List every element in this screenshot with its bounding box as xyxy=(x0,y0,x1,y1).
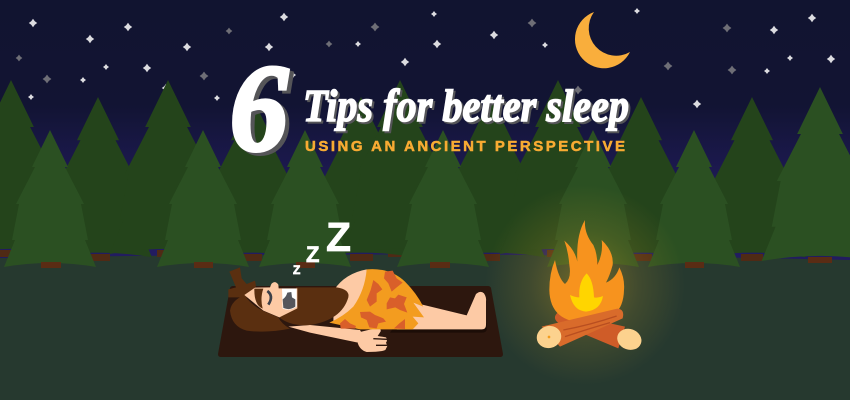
title: Tips for better sleep: Tips for better sleep xyxy=(303,80,629,131)
hair xyxy=(230,295,290,332)
flames xyxy=(549,220,624,323)
fur tunic xyxy=(329,269,424,329)
face xyxy=(244,282,297,317)
campfire glow xyxy=(485,185,685,385)
campfire xyxy=(534,220,644,353)
ground xyxy=(0,254,850,400)
stars xyxy=(16,8,835,108)
sleeping Z letters: Z xyxy=(326,214,351,260)
number 6: 6 xyxy=(230,40,288,177)
arm xyxy=(288,325,367,342)
title: Tips for better sleep: Tips for better sleep xyxy=(305,82,631,133)
sleeping Z letters: Z xyxy=(293,263,300,277)
closed eye xyxy=(267,291,271,305)
back log xyxy=(555,312,644,353)
sideburn xyxy=(254,289,263,309)
torso xyxy=(333,269,370,323)
hair knot xyxy=(228,267,256,297)
front row of pine trees xyxy=(4,87,850,268)
beard xyxy=(278,287,349,325)
mouth interior xyxy=(283,292,295,309)
subtitle: USING AN ANCIENT PERSPECTIVE xyxy=(305,138,625,155)
sleeping mat xyxy=(218,286,503,357)
leg shadow xyxy=(390,323,487,333)
sleeping caveman xyxy=(228,267,487,352)
crescent moon xyxy=(575,12,630,68)
sleeping Z letters xyxy=(293,214,351,277)
hand xyxy=(357,328,387,352)
sleeping Z letters: Z xyxy=(306,242,319,267)
number 6: 6 xyxy=(234,43,292,180)
flame core xyxy=(570,273,603,312)
open mouth xyxy=(282,289,297,310)
tunic spots xyxy=(340,271,407,329)
leg xyxy=(397,292,486,329)
back row of pine trees xyxy=(0,80,806,261)
front log xyxy=(534,309,623,351)
night sky xyxy=(0,0,850,262)
